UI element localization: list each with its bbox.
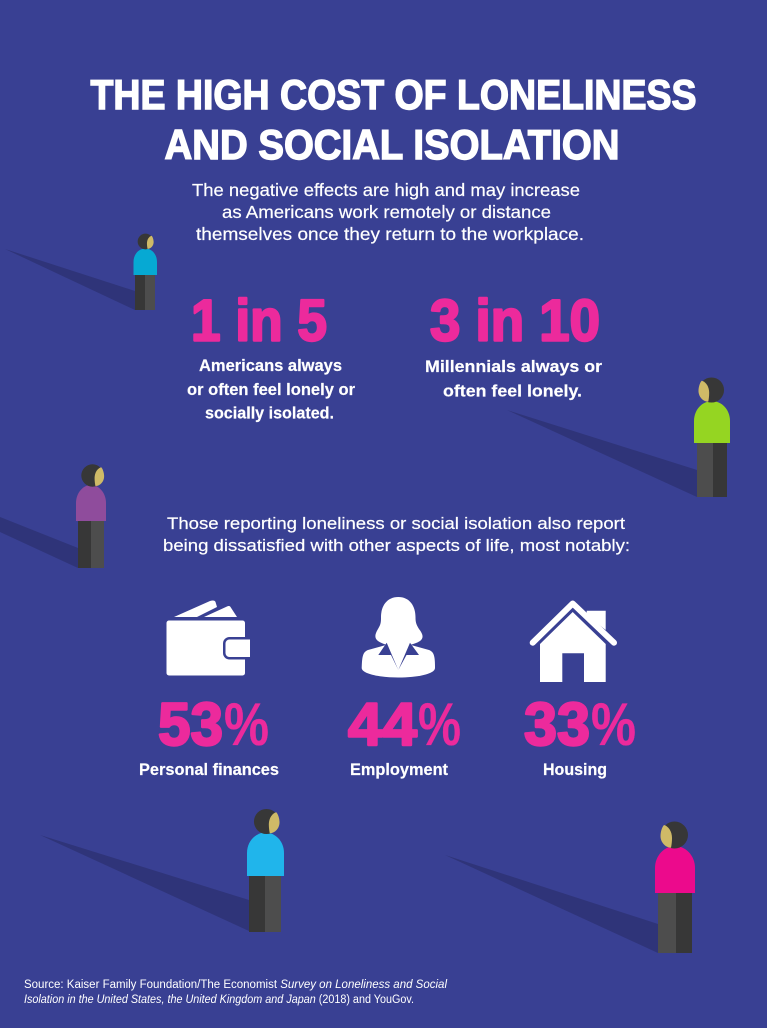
source note: Isolation in the United States, the United Kingdom and Japan (2018) and YouGov.	[24, 994, 414, 1006]
source note: Source: Kaiser Family Foundation/The Economist Survey on Loneliness and Social	[24, 979, 447, 991]
intro to dissatisfaction stats: Those reporting loneliness or social isolation also report	[167, 514, 625, 533]
title: THE HIGH COST OF LONELINESS	[90, 71, 696, 118]
stat: 1 in 5: 1 in 5	[191, 288, 327, 354]
stat 2 caption: often feel lonely.	[443, 382, 582, 400]
stat: 33% housing: Housing	[543, 761, 607, 779]
stat 1 caption: Americans always	[199, 356, 342, 375]
stat 1 caption	[187, 356, 355, 422]
stat 1 caption: socially isolated.	[205, 404, 334, 422]
intro to dissatisfaction stats	[163, 514, 630, 555]
figure: green person	[507, 377, 730, 497]
figure: small blue person	[5, 234, 157, 310]
figure: cyan person	[40, 809, 284, 932]
stat: 33% housing	[524, 691, 636, 779]
stat: 53% personal finances: %	[224, 691, 269, 758]
source note	[24, 979, 447, 1006]
stat: 53% personal finances: 53	[158, 691, 223, 758]
stat: 44% employment	[348, 691, 461, 779]
figure: purple person	[0, 464, 106, 568]
stat: 53% personal finances: Personal finances	[139, 761, 279, 779]
stat: 33% housing: %	[591, 691, 636, 758]
title: AND SOCIAL ISOLATION	[164, 121, 620, 168]
stat: 44% employment: Employment	[350, 761, 448, 779]
stat 2 caption	[425, 357, 602, 400]
icon: wallet	[166, 600, 250, 676]
title	[90, 71, 696, 168]
stat: 3 in 10	[425, 288, 602, 400]
stat: 1 in 5	[187, 288, 355, 422]
stat: 53% personal finances	[139, 691, 279, 779]
intro to dissatisfaction stats: being dissatisfied with other aspects of life, most notably:	[163, 536, 630, 555]
stat 2 caption: Millennials always or	[425, 357, 602, 376]
stat: 33% housing: 33	[524, 691, 590, 758]
subtitle	[192, 180, 584, 244]
icon: businesswoman	[362, 597, 435, 678]
subtitle: themselves once they return to the workplace.	[196, 224, 584, 244]
subtitle: The negative effects are high and may increase	[192, 180, 580, 200]
stat: 44% employment: 44	[348, 691, 418, 758]
subtitle: as Americans work remotely or distance	[222, 202, 551, 222]
figure: magenta person	[445, 822, 695, 953]
icon: house	[533, 604, 614, 682]
stat: 3 in 10: 3 in 10	[430, 288, 600, 354]
stat: 44% employment: %	[418, 691, 461, 758]
stat 1 caption: or often feel lonely or	[187, 380, 355, 399]
